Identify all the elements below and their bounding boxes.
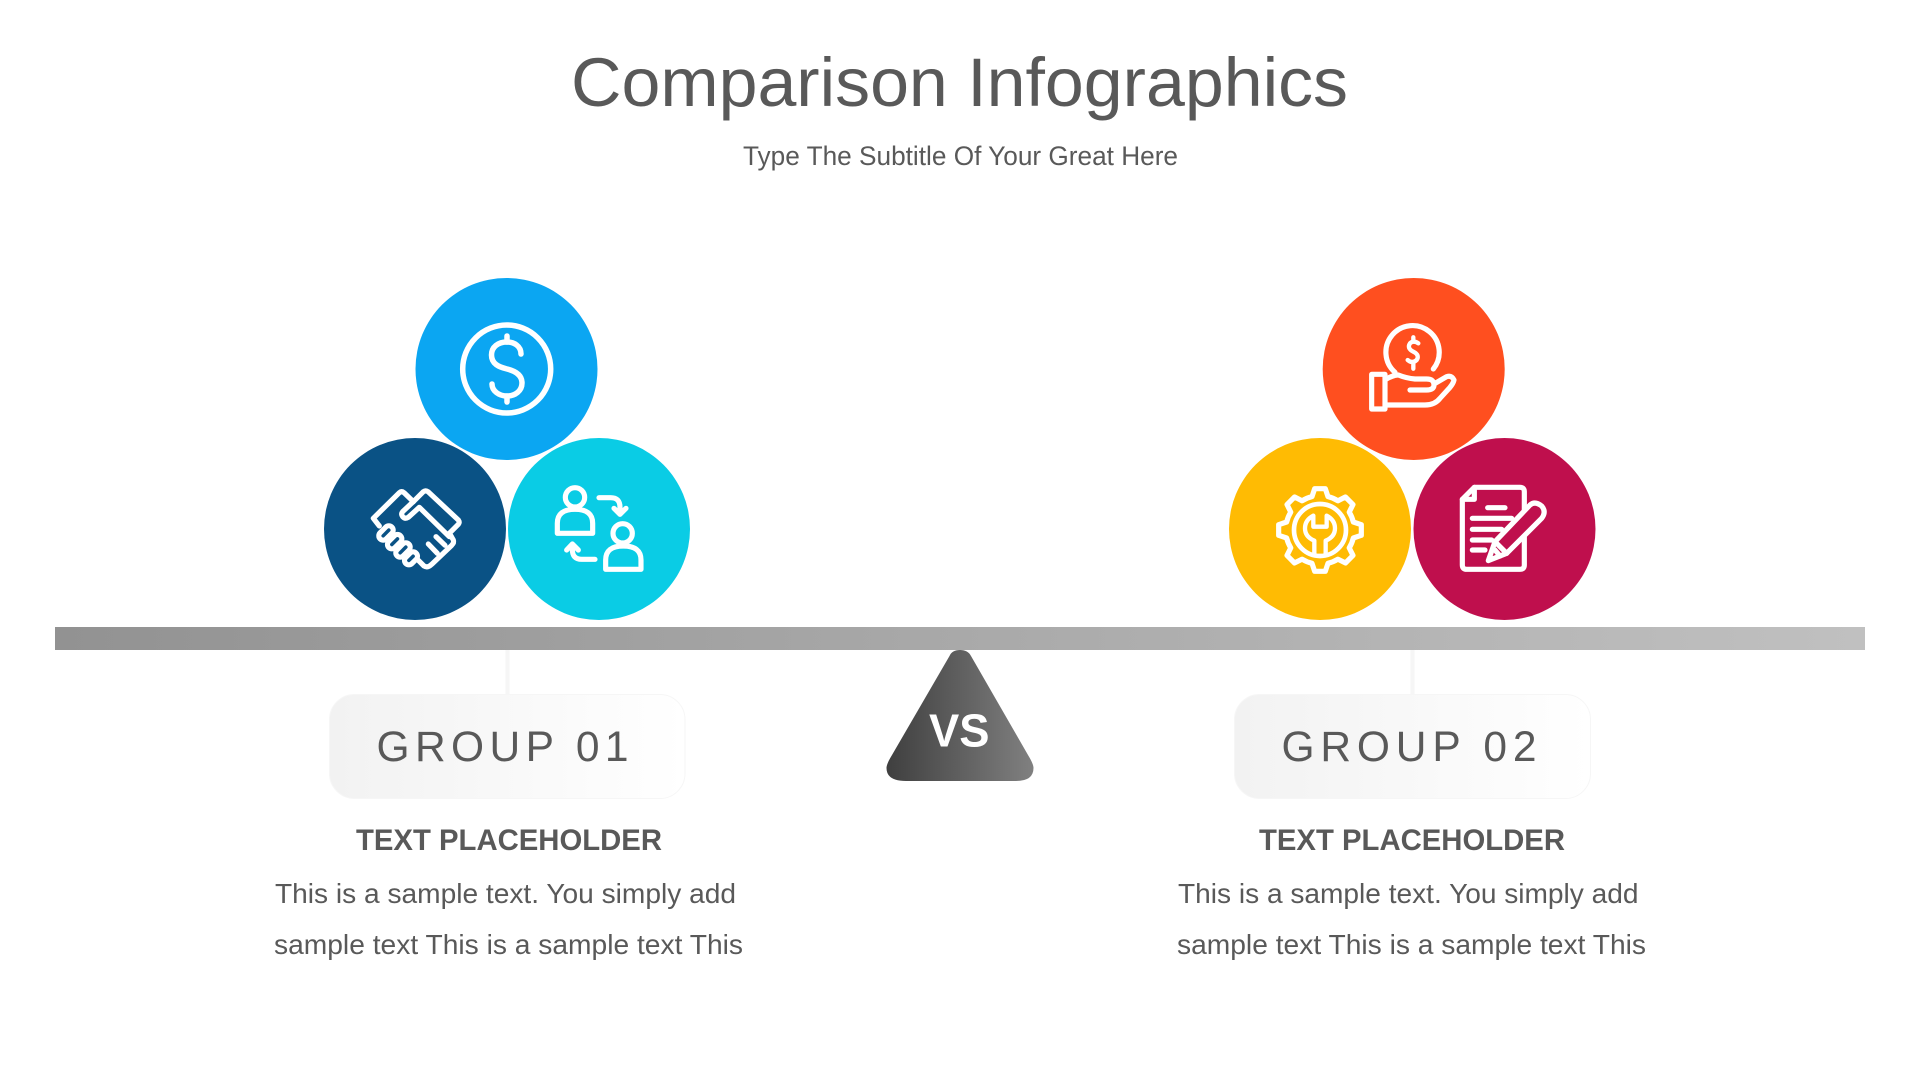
circle cluster: group 02 (1229, 278, 1596, 620)
VS label: VS (929, 704, 990, 756)
subtitle: Type The Subtitle Of Your Great Here (743, 141, 1178, 171)
group 01 body text: sample text This is a sample text This (274, 929, 743, 960)
group 02 body text: sample text This is a sample text This (1177, 929, 1646, 960)
title: Comparison Infographics (571, 44, 1348, 121)
icon: dollar coin (463, 325, 551, 413)
group 01 body text (274, 878, 743, 960)
circle: gear with wrench (1229, 438, 1411, 620)
group 02 body text: This is a sample text. You simply add (1178, 878, 1638, 909)
group 01 heading: TEXT PLACEHOLDER (356, 824, 662, 857)
group 02 label box: GROUP 02 (1282, 724, 1536, 771)
VS triangle (886, 650, 1034, 781)
circle: people exchange (508, 438, 690, 620)
icon: people exchange (557, 488, 641, 569)
icon: handshake (373, 491, 459, 567)
icon: gear with wrench (1279, 489, 1361, 571)
circle cluster: group 01 (324, 278, 690, 620)
icon: money in hand (1372, 326, 1454, 409)
group 01 label box: GROUP 01 (376, 724, 628, 771)
connector: group 01 (506, 650, 510, 694)
panel: group 02 (1177, 694, 1646, 960)
circle: handshake (324, 438, 506, 620)
connector: group 02 (1410, 650, 1414, 694)
circle: document and pencil (1414, 438, 1596, 620)
icon: document and pencil (1462, 487, 1544, 569)
balance beam (55, 627, 1865, 650)
group 01 label box (330, 694, 685, 798)
circle: dollar (416, 278, 598, 460)
circle: money in hand (1323, 278, 1505, 460)
group 02 label box (1234, 694, 1590, 798)
group 02 body text (1177, 878, 1646, 960)
group 02 heading: TEXT PLACEHOLDER (1259, 824, 1565, 857)
panel: group 01 (274, 694, 743, 960)
group 01 body text: This is a sample text. You simply add (275, 878, 736, 909)
